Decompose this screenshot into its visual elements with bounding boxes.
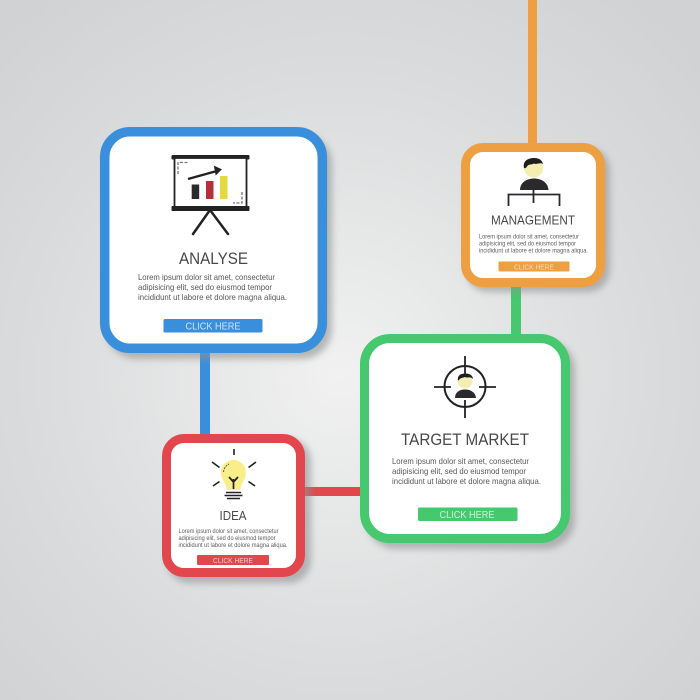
button: analyse	[164, 319, 262, 332]
panel: management	[466, 148, 610, 292]
button: management	[498, 262, 570, 272]
icon: presentation board	[172, 155, 250, 234]
text block: management	[479, 234, 588, 254]
button: idea: CLICK HERE	[213, 556, 253, 565]
panel: target market	[364, 338, 575, 549]
text block: management: Lorem ipsum dolor sit amet, consectetur	[479, 234, 579, 240]
connector: red line	[302, 487, 362, 496]
heading: idea: IDEA	[220, 508, 247, 523]
text block: analyse: adipisicing elit, sed do eiusmod tempor	[138, 282, 272, 292]
text block: analyse: Lorem ipsum dolor sit amet, consectetur	[138, 272, 275, 282]
heading: target market: TARGET MARKET	[401, 430, 529, 449]
heading: analyse: ANALYSE	[179, 249, 248, 268]
text block: idea	[178, 529, 288, 549]
panel: idea	[166, 438, 311, 583]
text block: analyse: incididunt ut labore et dolore magna aliqua.	[138, 292, 287, 302]
text block: idea: incididunt ut labore et dolore magna aliqua.	[178, 543, 288, 549]
connector: green line	[511, 284, 521, 336]
button: management: CLICK HERE	[514, 262, 554, 272]
text block: management: adipisicing elit, sed do eiusmod tempor	[479, 242, 576, 248]
text block: idea: Lorem ipsum dolor sit amet, consectetur	[178, 529, 278, 535]
panel: analyse	[105, 132, 332, 359]
text block: target market: adipisicing elit, sed do eiusmod tempor	[392, 466, 526, 476]
heading: management: MANAGEMENT	[491, 212, 575, 228]
icon: light bulb	[212, 449, 256, 498]
icon: crosshair target with person	[434, 356, 496, 418]
text block: target market	[392, 456, 541, 486]
text block: target market: incididunt ut labore et dolore magna aliqua.	[392, 476, 541, 486]
connector: orange line	[528, 0, 537, 146]
button: target market: CLICK HERE	[440, 510, 495, 521]
button: analyse: CLICK HERE	[186, 322, 241, 332]
text block: management: incididunt ut labore et dolore magna aliqua.	[479, 248, 588, 254]
text block: target market: Lorem ipsum dolor sit amet, consectetur	[392, 456, 529, 466]
text block: analyse	[138, 272, 287, 302]
text block: idea: adipisicing elit, sed do eiusmod tempor	[178, 536, 276, 542]
button: idea	[197, 555, 269, 565]
connector: blue line	[200, 350, 210, 436]
button: target market	[418, 508, 518, 521]
icon: manager with org chart	[508, 158, 560, 206]
